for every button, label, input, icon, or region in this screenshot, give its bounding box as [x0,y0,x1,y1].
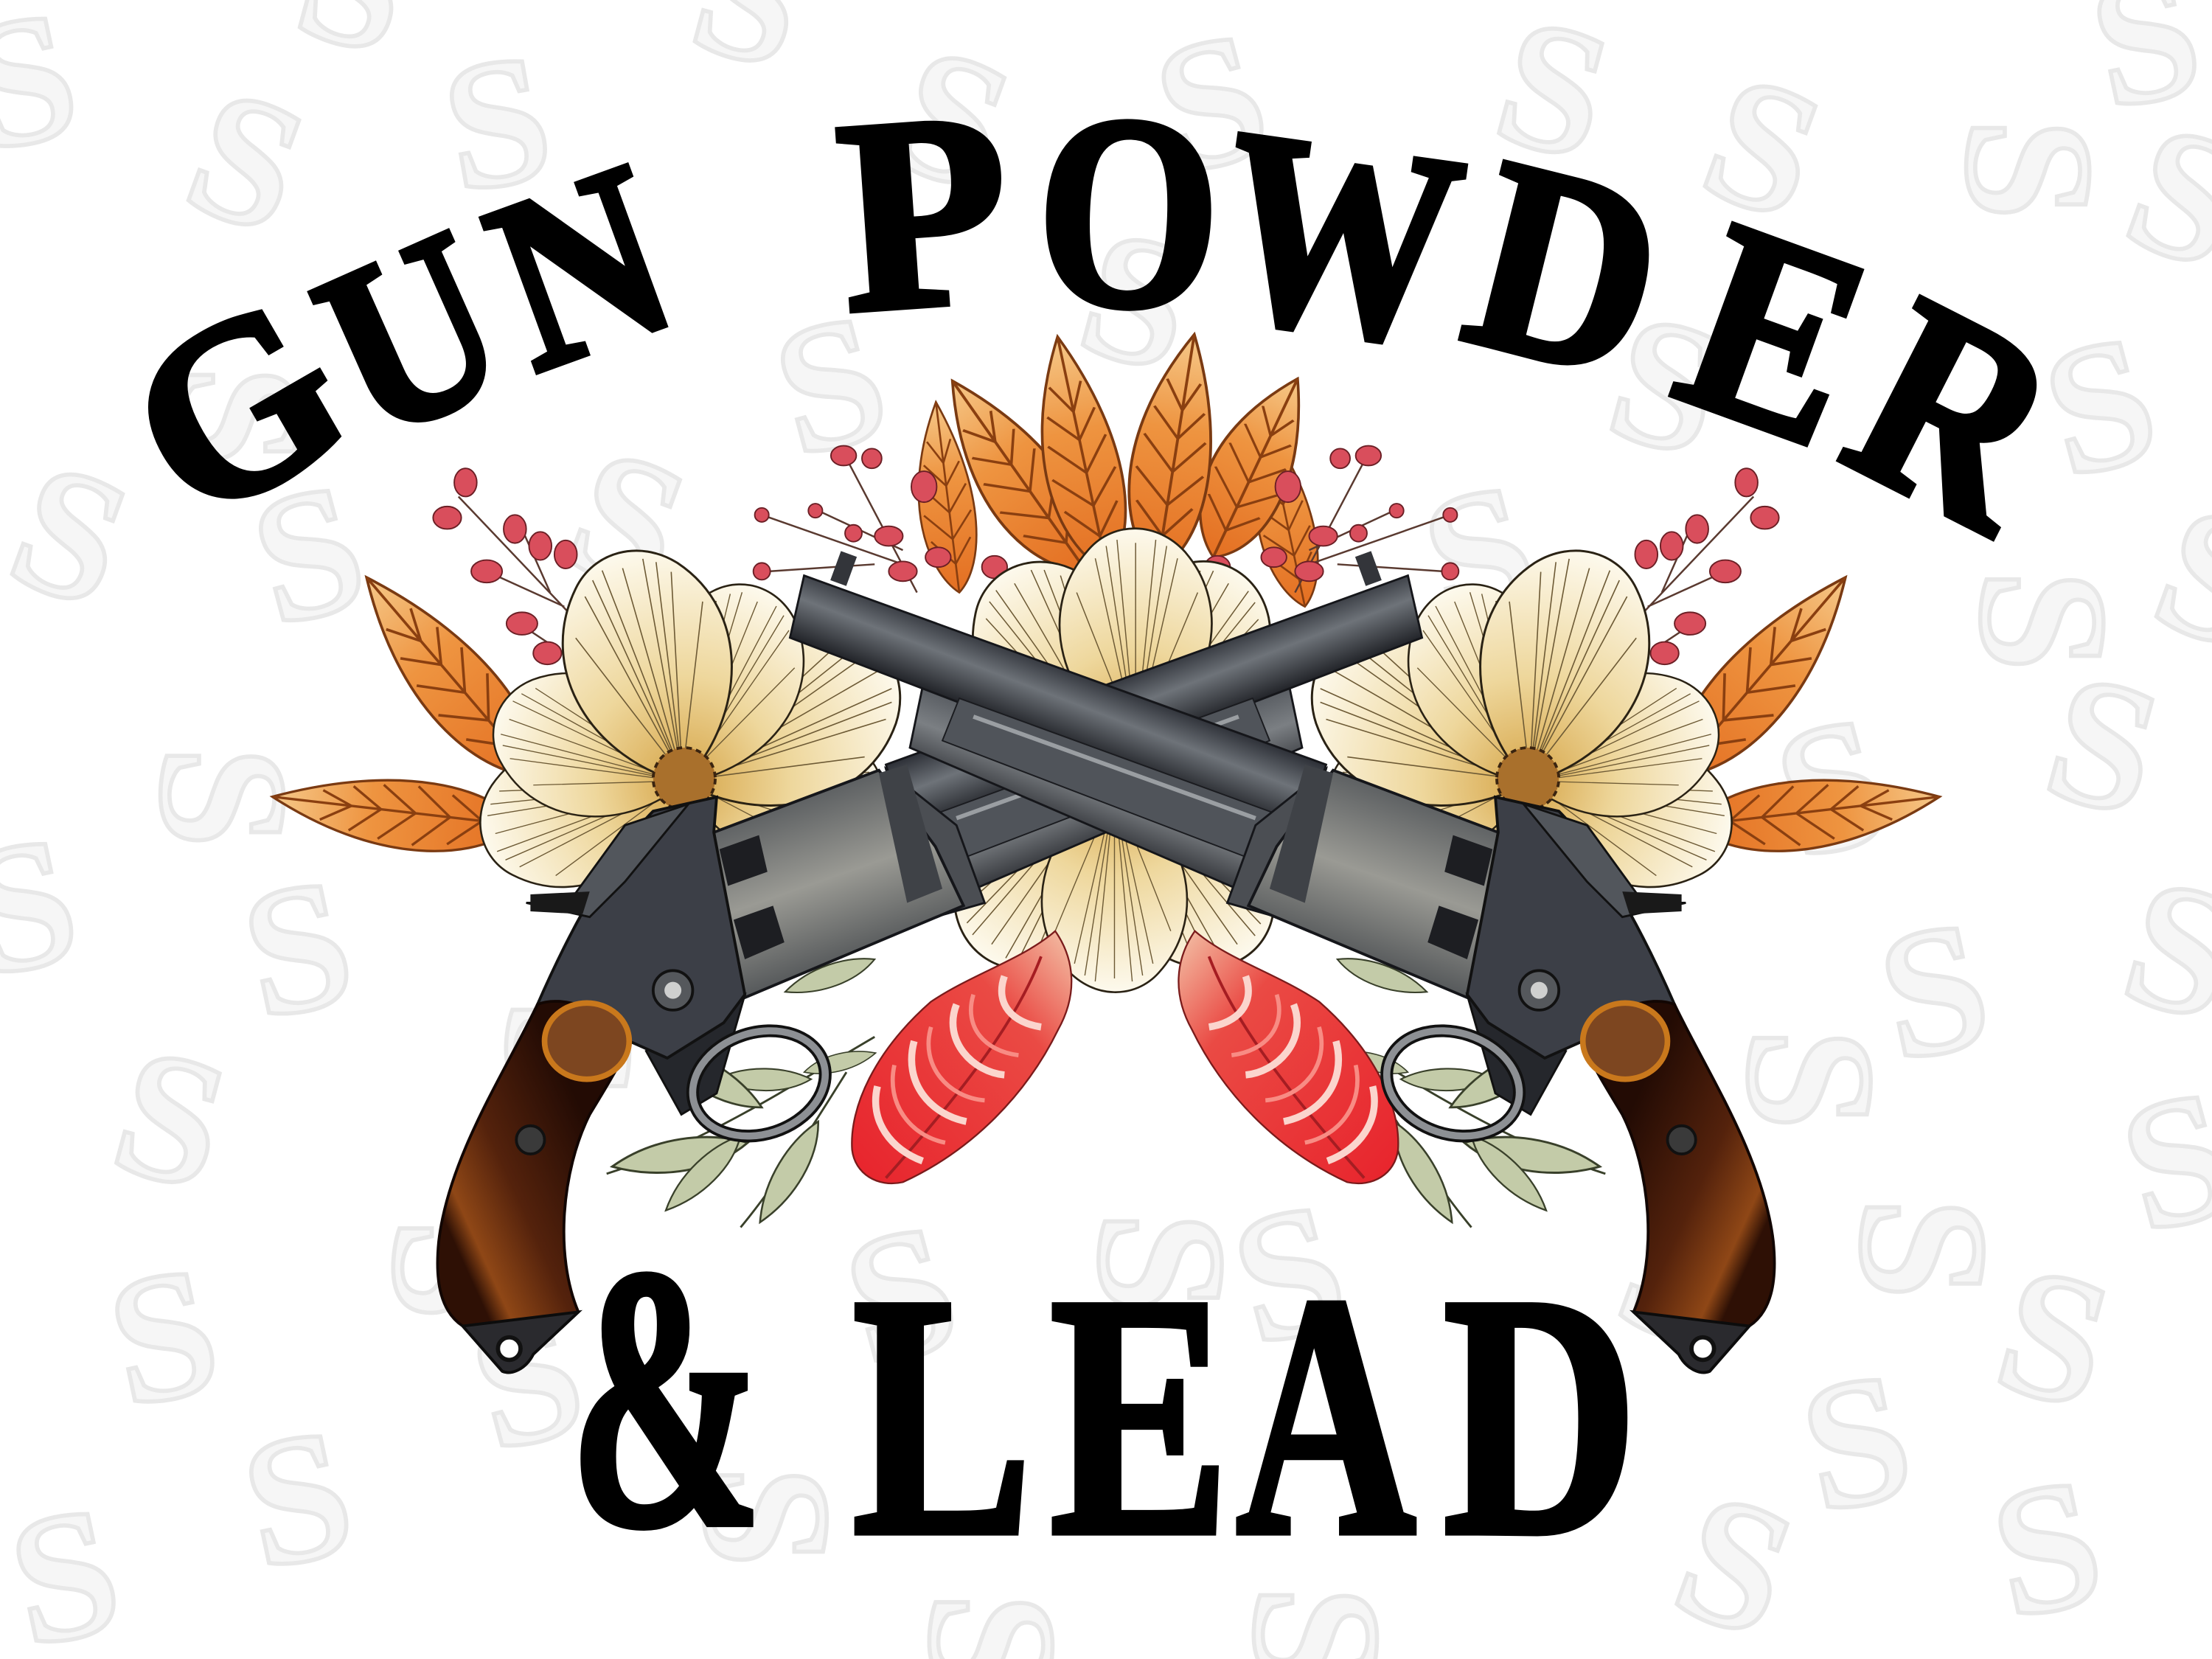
background watermark pattern: S [2025,294,2176,517]
background watermark pattern: S [451,1267,602,1491]
background watermark pattern: S [1823,1197,2026,1299]
title: & Lead [569,1192,1638,1607]
right revolver [790,551,1775,1372]
title: Gun Powder: R [1808,240,2104,591]
background watermark pattern: S [1404,442,1555,665]
background watermark pattern: S [226,838,369,1058]
title: Gun Powder: O [1032,56,1225,367]
background watermark pattern: S [545,407,711,633]
left revolver [437,551,1422,1372]
background watermark pattern: S [92,1226,234,1446]
red feather right [1178,931,1398,1183]
background watermark pattern: S [136,365,340,467]
background watermark pattern: S [1979,1225,2130,1448]
background watermark pattern: S [755,273,906,496]
title: Gun Powder: P [830,55,1018,370]
title: Gun Powder [86,55,2104,591]
background watermark pattern: S [869,5,1035,232]
background watermark pattern: S [1214,1162,1365,1385]
title: Gun Powder: G [86,243,388,574]
background watermark pattern: S [1756,675,1907,898]
background watermark pattern: S [226,1388,369,1608]
background watermark pattern: S [666,1466,869,1568]
background watermark pattern: S [1976,1438,2118,1658]
top centre orange leaves [907,328,1330,613]
title: Gun Powder: D [1443,100,1690,438]
title: Gun Powder: N [459,111,703,422]
title: & Lead: A [1237,1225,1416,1607]
title: & Lead: L [852,1224,1032,1607]
background watermark pattern: S [122,746,326,848]
right floral cluster [1205,446,1944,1229]
background watermark pattern: S [1928,118,2132,220]
red feather left [852,931,1071,1183]
background watermark pattern: S [164,47,330,274]
background watermark pattern: S [1060,1211,1264,1314]
background watermark pattern: S [233,442,384,665]
background watermark pattern: S [355,1219,559,1321]
background watermark pattern: S [825,1183,976,1406]
title: & Lead: D [1443,1224,1638,1607]
left floral cluster [268,446,1007,1229]
background watermark pattern: S [1062,189,1213,411]
background watermark pattern: S [96,1006,247,1230]
title: Gun Powder: W [1203,70,1478,405]
background watermark pattern: S [1680,33,1846,260]
centre flower [918,529,1311,1002]
background watermark pattern: S [1942,570,2146,672]
background watermark pattern: S [1596,1162,1761,1388]
title: Gun Powder: E [1647,164,1903,505]
title: & Lead: & [569,1192,762,1605]
title: Gun Powder: U [282,177,540,492]
background watermark pattern: S [468,1000,672,1102]
background watermark pattern: S [1591,273,1742,496]
background watermark pattern: S [429,13,565,232]
title: & Lead: E [1050,1224,1230,1607]
background watermark pattern: S [1863,880,2005,1101]
background watermark pattern: S [1709,1028,1913,1130]
background watermark pattern: S [2028,633,2180,856]
background watermark pattern: S [1785,1332,1927,1552]
